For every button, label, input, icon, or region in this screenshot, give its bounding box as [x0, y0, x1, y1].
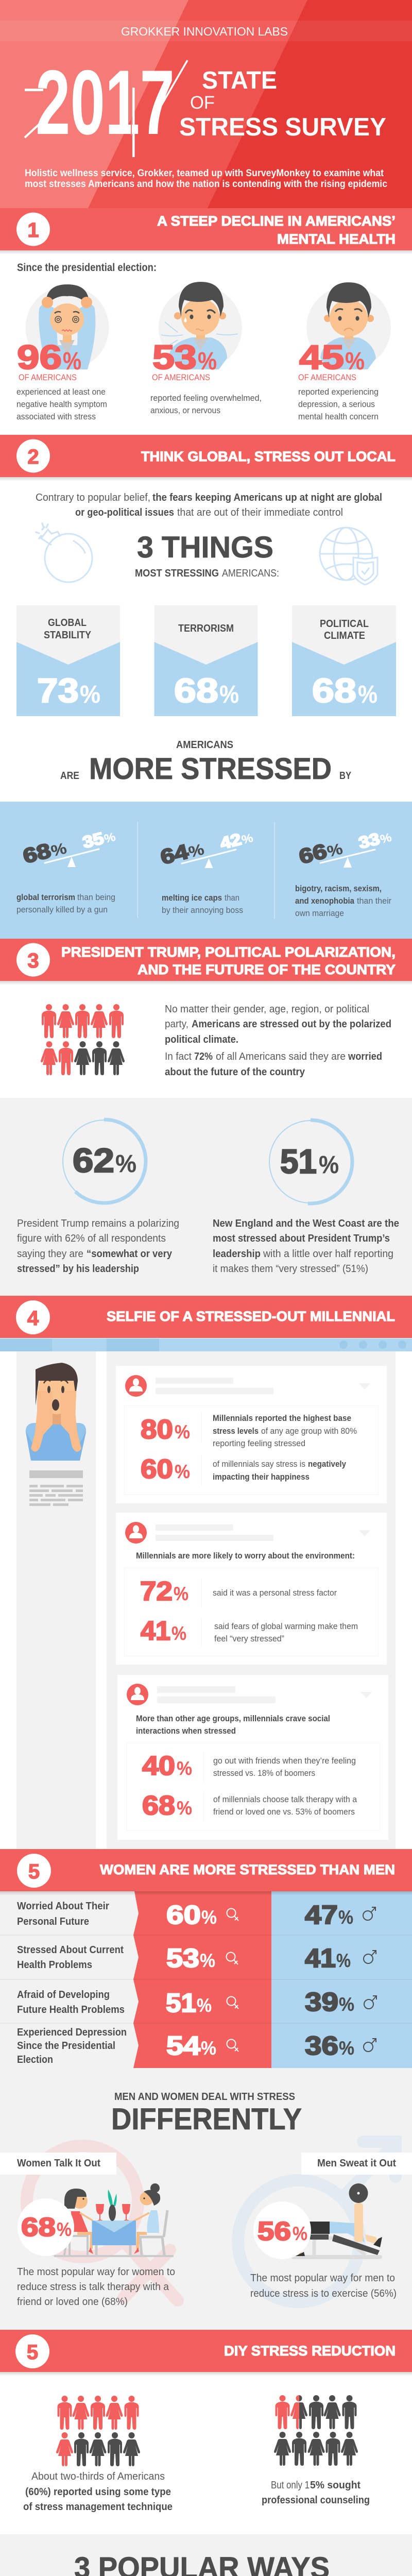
stat: 53%: 53 [152, 338, 197, 376]
text: women technique: The most popular way for women to [17, 2266, 175, 2278]
row: depression: Experienced Depression [17, 2027, 127, 2038]
text: column 3: reported experiencing [298, 387, 379, 397]
post: happiness: 60 [141, 1454, 173, 1484]
card: terrorism: 68 [174, 671, 218, 709]
icon: white disc with 68% [18, 2198, 74, 2256]
row: personal future: Worried About Their [17, 1901, 109, 1912]
card: political climate: CLIMATE [324, 630, 365, 641]
text: new england and west coast: New England and the West Coast are the [213, 1218, 399, 1229]
chart: 62% ring [62, 1120, 146, 1203]
post: social interactions: % [177, 1798, 192, 1819]
text: trump polarizing: “somewhat or very [87, 1248, 173, 1260]
subheading: most stressing americans [135, 568, 279, 579]
text: two thirds [23, 2471, 173, 2513]
profile text placeholder [29, 1485, 83, 1506]
row: depression: % [201, 2038, 216, 2059]
heading: americans are more stressed by: BY [339, 770, 352, 782]
post: happiness: Millennials reported the highest base [213, 1414, 351, 1423]
label: men sweat it out: Men Sweat it Out [317, 2158, 396, 2169]
text: column 2: reported feeling overwhelmed, [150, 394, 262, 403]
text: two thirds: of stress management technique [23, 2501, 173, 2513]
heading: americans are more stressed by [60, 739, 352, 786]
text: men technique: The most popular way for men to [250, 2273, 395, 2284]
post: environment [116, 1513, 387, 1665]
text: column 2: anxious, or nervous [150, 406, 220, 415]
post: social interactions [117, 1675, 388, 1840]
post: happiness: of millennials say stress is [213, 1460, 305, 1469]
text: polarized climate: Americans are stressed out by the polarized [192, 1019, 391, 1030]
icon: globe with shield [320, 528, 377, 585]
icon: shocked millennial [26, 1363, 86, 1461]
text: women technique [17, 2266, 175, 2308]
chart: terrorism seesaw [21, 826, 117, 868]
section 4 banner: 4 [27, 1307, 39, 1330]
chart: ice caps seesaw: % [240, 831, 254, 846]
header panel [0, 0, 412, 208]
post: happiness: negatively [308, 1460, 347, 1469]
section 3 banner: 3 [27, 950, 39, 972]
text: women technique: reduce stress is talk therapy with a [17, 2281, 169, 2293]
text: new england and west coast: leadership [213, 1248, 261, 1260]
stat: 45%: 45 [299, 338, 344, 376]
row: current health: Stressed About Current [17, 1944, 124, 1956]
post: environment: said fears of global warming make them [214, 1622, 358, 1631]
post: environment: feel “very stressed” [214, 1634, 284, 1643]
section 5 banner [0, 1849, 412, 1891]
chart: 51% ring: % [319, 1151, 339, 1179]
label: women talk it out: Women Talk It Out [17, 2158, 100, 2169]
label: women talk it out [0, 2153, 116, 2175]
text: ice caps comparison: by their annoying boss [162, 906, 243, 915]
row: depression: 54 [166, 2031, 201, 2060]
icon: white disc with 68%: % [57, 2219, 72, 2240]
icon: large male symbol [238, 2142, 396, 2302]
post: environment: % [174, 1583, 188, 1604]
intro paragraph: the fears keeping Americans up at night are global [152, 492, 382, 503]
panel: gender table [0, 1891, 412, 2068]
chart: 51% ring [269, 1120, 352, 1204]
section 3 banner [0, 939, 412, 985]
text: only 15 percent: But only 1 [271, 2480, 310, 2491]
text: trump polarizing: figure with 62% of all respondents [17, 1233, 166, 1244]
post: environment: 41 [141, 1616, 170, 1646]
heading: since the election: Since the presidential election: [17, 262, 157, 274]
text: only 15 percent [262, 2480, 370, 2506]
text: column 2 [150, 394, 262, 415]
row: current health [17, 1943, 376, 1973]
caption: of americans column 2: OF AMERICANS [152, 372, 210, 382]
post: happiness: 80 [141, 1415, 173, 1445]
post: social interactions: stressed vs. 18% of boomers [213, 1769, 315, 1778]
post: social interactions: interactions when stressed [136, 1726, 236, 1736]
chart: terrorism seesaw: % [102, 830, 117, 845]
text: polarized climate [165, 1004, 391, 1078]
post: social interactions: More than other age groups, millennials crave social [136, 1714, 330, 1723]
row: depression: % [339, 2038, 354, 2059]
row: personal future: 47 [305, 1900, 338, 1929]
card: political climate [292, 605, 396, 716]
text: trump polarizing: President Trump remains a polarizing [17, 1218, 179, 1229]
chart: terrorism seesaw: 68 [21, 839, 53, 868]
text: new england and west coast [213, 1218, 399, 1275]
row: current health: Health Problems [17, 1959, 92, 1971]
browser bar [0, 1338, 412, 1351]
text: new england and west coast: most stressed about President Trump’s [213, 1233, 390, 1244]
card: global stability: 73 [37, 671, 79, 709]
title: 2017 logotype: 2017 [36, 51, 175, 154]
row: future health: 51 [166, 1988, 196, 2018]
card: global stability: % [80, 681, 100, 708]
icon: large female symbol [27, 2146, 178, 2300]
section 6 banner [0, 2330, 412, 2376]
stat: 96% [17, 338, 81, 376]
chart: ice caps seesaw: % [187, 841, 206, 861]
row: personal future: Personal Future [17, 1916, 89, 1927]
panel: men and women differently [0, 2068, 412, 2330]
panel: 3 popular ways [0, 2534, 412, 2576]
section 4 banner [0, 1296, 412, 1338]
card: political climate: POLITICAL [320, 618, 369, 630]
text: terrorism comparison: than being [77, 893, 115, 902]
row: future health: % [339, 1994, 354, 2015]
card: terrorism: TERRORISM [178, 622, 234, 634]
caption: of americans column 3: OF AMERICANS [298, 372, 356, 382]
panel: feed [107, 1351, 396, 1849]
row: depression: 36 [305, 2031, 338, 2060]
post: happiness: of any age group with 80% [261, 1427, 357, 1436]
brand line: GROKKER INNOVATION LABS [121, 25, 288, 38]
profile name bar [29, 1470, 83, 1478]
section 6 banner: DIY STRESS REDUCTION [224, 2343, 396, 2359]
post: environment: % [171, 1623, 186, 1644]
row: future health: % [197, 1995, 212, 2016]
text: bigotry comparison: own marriage [295, 909, 344, 918]
intro text [25, 167, 387, 190]
section 4 banner: SELFIE OF A STRESSED-OUT MILLENNIAL [107, 1309, 395, 1324]
row: personal future: % [201, 1907, 217, 1928]
text: column 1: experienced at least one [16, 387, 106, 397]
section 6 banner: 5 [27, 2341, 38, 2364]
title: state of stress survey: STATE [202, 67, 277, 94]
intro paragraph [36, 492, 382, 518]
post: happiness [116, 1366, 387, 1503]
card: terrorism [154, 605, 258, 716]
stat: 53%: % [198, 348, 217, 375]
text: only 15 percent: professional counseling [262, 2495, 370, 2506]
text: polarized climate: of all Americans said they are [216, 1051, 346, 1062]
stat: 45% [299, 338, 365, 376]
post: social interactions: % [177, 1758, 192, 1779]
heading: americans are more stressed by: AMERICANS [176, 739, 233, 751]
intro paragraph: Contrary to popular belief, [36, 492, 150, 503]
row: depression: Since the Presidential [17, 2040, 115, 2052]
text: polarized climate: about the future of the country [165, 1066, 305, 1078]
stat: 96%: 96 [17, 338, 62, 376]
card: global stability: STABILITY [44, 629, 91, 641]
icon: people 15 percent [274, 2395, 358, 2466]
heading: 3 things: 3 THINGS [137, 531, 273, 564]
text: men technique: reduce stress is to exercise (56%) [250, 2288, 397, 2299]
text: polarized climate: party, [165, 1019, 188, 1030]
row: current health: % [336, 1950, 351, 1971]
panel: trump stats [0, 1098, 412, 1296]
chart: ice caps seesaw: 42 [218, 829, 243, 853]
heading: men and women deal with stress: MEN AND WOMEN DEAL WITH STRESS [114, 2091, 295, 2103]
text: polarized climate: In fact [165, 1051, 192, 1062]
title: state of stress survey [179, 67, 386, 141]
section 1 banner: A STEEP DECLINE IN AMERICANS’ [157, 213, 396, 229]
title: 2017 logotype [25, 51, 187, 157]
section 1 banner: MENTAL HEALTH [277, 231, 396, 247]
text: bigotry comparison: bigotry, racism, sexism, [295, 884, 382, 893]
chart: 51% ring: 51 [280, 1142, 317, 1180]
card: political climate: % [358, 681, 377, 708]
text: polarized climate: 72% [194, 1051, 213, 1062]
text: bigotry comparison: than their [357, 896, 391, 906]
text: trump polarizing [17, 1218, 179, 1275]
chart: 62% ring: 62 [73, 1141, 114, 1179]
section 2 banner: 2 [27, 446, 39, 468]
text: two thirds: (60%) reported using some type [25, 2486, 171, 2498]
text: polarized climate: political climate. [165, 1034, 238, 1045]
card: terrorism: % [219, 681, 239, 708]
text: new england and west coast: it makes them “very stressed” (51%) [213, 1263, 368, 1275]
chart: 62% ring: % [115, 1150, 136, 1178]
icon: people 6 of 10 [56, 2396, 140, 2466]
row: personal future: % [338, 1907, 353, 1928]
card: political climate: 68 [312, 671, 356, 709]
icon: sad man [306, 282, 391, 369]
text: column 3 [298, 387, 379, 421]
section 1 banner: 1 [27, 219, 39, 242]
text: men technique [250, 2273, 397, 2299]
text: bigotry comparison: and xenophobia [295, 896, 355, 906]
card: global stability [16, 605, 120, 716]
chart: terrorism seesaw: % [49, 840, 68, 860]
section 3 banner: AND THE FUTURE OF THE COUNTRY [138, 962, 396, 977]
row: current health: % [200, 1950, 215, 1971]
section 2 banner: THINK GLOBAL, STRESS OUT LOCAL [141, 449, 396, 464]
row: future health [17, 1987, 376, 2018]
post: environment: Millennials are more likely to worry about the environment: [136, 1551, 355, 1561]
label: men sweat it out [301, 2153, 412, 2175]
text: polarized climate: No matter their gender, age, region, or political [165, 1004, 369, 1015]
text: trump polarizing: stressed” by his leadership [17, 1263, 139, 1275]
section 5 banner: 5 [28, 1860, 40, 1883]
heading: differently: DIFFERENTLY [111, 2103, 302, 2136]
chart: ice caps seesaw [158, 827, 254, 869]
caption: of americans column 1: OF AMERICANS [19, 372, 77, 382]
intro paragraph: that are out of their immediate control [177, 507, 343, 518]
text: terrorism comparison [16, 893, 115, 914]
post: social interactions: 40 [142, 1751, 175, 1781]
icon: white disc with 56%: % [293, 2223, 307, 2244]
heading: americans are more stressed by: MORE STRESSED [89, 752, 332, 786]
heading: americans are more stressed by: ARE [60, 770, 79, 782]
text: women technique: friend or loved one (68%) [17, 2296, 128, 2308]
text: two thirds: About two-thirds of Americans [31, 2471, 165, 2482]
post: happiness: % [175, 1421, 190, 1443]
text: terrorism comparison: personally killed by a gun [16, 905, 108, 914]
icon: women at a table [54, 2183, 174, 2257]
subheading: most stressing americans: AMERICANS: [222, 568, 279, 579]
row: future health: 39 [305, 1987, 338, 2016]
section 2 banner [0, 435, 412, 481]
subheading: most stressing americans: MOST STRESSING [135, 568, 219, 579]
text: only 15 percent: 5% sought [310, 2480, 360, 2491]
text: column 3: depression, a serious [298, 400, 375, 409]
intro text: Holistic wellness service, Grokker, teamed up with SurveyMonkey to examine what [25, 167, 384, 179]
chart: bigotry seesaw: % [379, 831, 393, 846]
chart: bigotry seesaw: % [325, 840, 345, 860]
card: global stability: GLOBAL [48, 617, 87, 629]
text: column 1: negative health symptom [16, 400, 107, 409]
panel: comparison band [0, 802, 412, 939]
section 5 banner: WOMEN ARE MORE STRESSED THAN MEN [100, 1862, 395, 1877]
stat: 53% [152, 338, 217, 376]
section 3 banner: PRESIDENT TRUMP, POLITICAL POLARIZATION, [61, 944, 396, 960]
chart: bigotry seesaw: 66 [297, 840, 329, 869]
post: social interactions: go out with friends when they’re feeling [213, 1756, 356, 1766]
post: social interactions: friend or loved one vs. 53% of boomers [213, 1807, 355, 1817]
post: happiness: reporting feeling stressed [213, 1439, 305, 1448]
stat: 96%: % [63, 348, 81, 375]
text: polarized climate: worried [348, 1051, 382, 1062]
icon: anxious man [159, 282, 242, 369]
text: new england and west coast: with a little over half reporting [263, 1248, 393, 1260]
icon: dizzy man [26, 284, 109, 369]
title: state of stress survey: OF [190, 93, 215, 113]
text: terrorism comparison: global terrorism [16, 893, 75, 902]
stat: 45%: % [345, 348, 365, 375]
row: personal future: 60 [166, 1900, 201, 1929]
post: happiness: stress levels [213, 1427, 259, 1436]
section 1 banner [0, 208, 412, 255]
post: happiness: impacting their happiness [213, 1472, 310, 1482]
row: personal future [17, 1900, 375, 1929]
panel: profile sidebar [16, 1351, 96, 1849]
chart: ice caps seesaw: 64 [158, 840, 191, 869]
text: ice caps comparison: than [225, 893, 239, 903]
text: trump polarizing: saying they are [17, 1248, 83, 1260]
icon: white disc with 56%: 56 [258, 2216, 291, 2246]
intro paragraph: or geo-political issues [75, 507, 174, 518]
icon: people 7 of 10 [41, 1004, 125, 1075]
text: ice caps comparison [162, 893, 243, 915]
post: happiness: % [175, 1461, 190, 1482]
text: column 3: mental health concern [298, 412, 379, 421]
icon: bomb [36, 523, 92, 582]
row: future health: Future Health Problems [17, 2004, 125, 2015]
post: social interactions: 68 [142, 1791, 175, 1821]
chart: bigotry seesaw: 33 [357, 829, 382, 852]
icon: white disc with 68%: 68 [21, 2212, 56, 2242]
chart: terrorism seesaw: 35 [81, 828, 106, 852]
row: current health: 41 [305, 1943, 336, 1973]
text: column 1 [16, 387, 107, 421]
text: column 1: associated with stress [16, 412, 96, 421]
icon: man bench pressing [291, 2183, 382, 2259]
row: current health: 53 [166, 1943, 199, 1973]
icon: white disc with 56% [253, 2201, 311, 2259]
chart: bigotry seesaw [297, 826, 393, 869]
row: future health: Afraid of Developing [17, 1989, 110, 2001]
title: state of stress survey: STRESS SURVEY [179, 113, 386, 141]
post: environment: said it was a personal stress factor [213, 1588, 337, 1598]
text: bigotry comparison [295, 884, 391, 918]
post: social interactions: of millennials choose talk therapy with a [213, 1795, 357, 1804]
row: depression [17, 2027, 376, 2065]
row: depression: Election [17, 2054, 53, 2065]
post: environment: 72 [140, 1577, 173, 1606]
text: ice caps comparison: melting ice caps [162, 893, 222, 903]
